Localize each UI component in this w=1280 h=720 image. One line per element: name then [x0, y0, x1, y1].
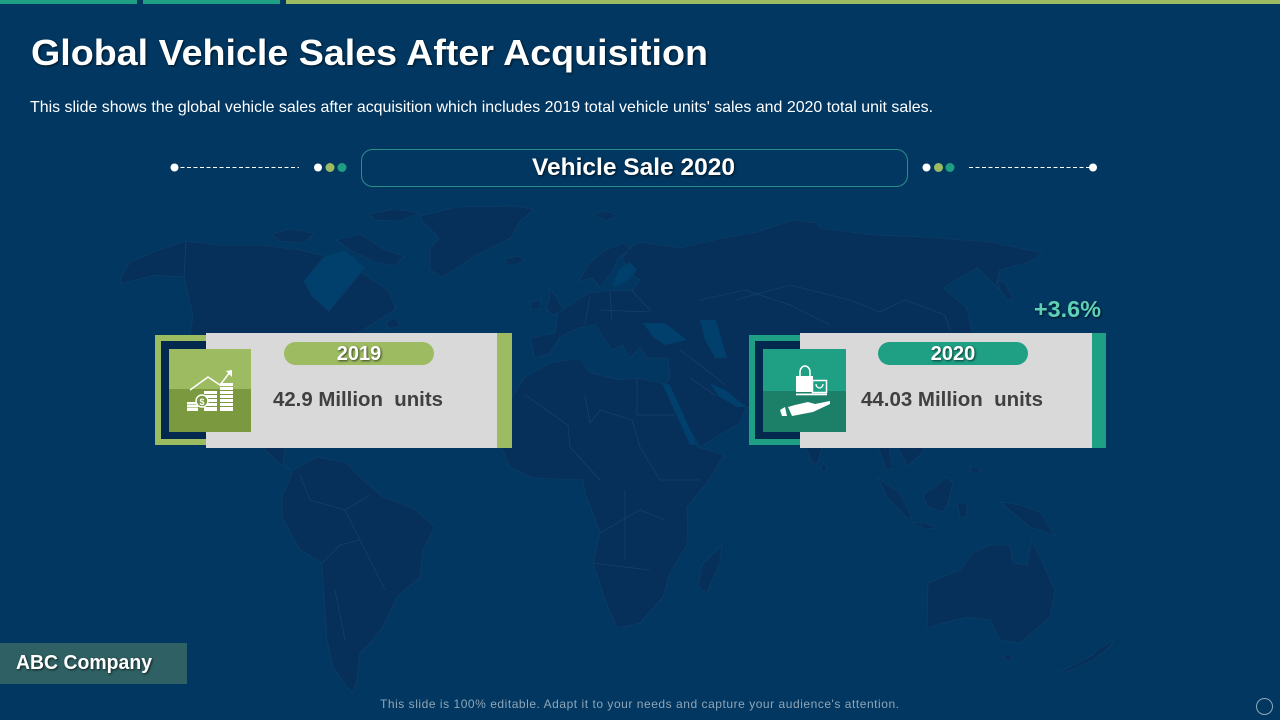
icon: coins and rising chart [169, 349, 251, 432]
year label 2019: 2019 [337, 343, 381, 365]
map: Scandinavia [579, 243, 630, 287]
icon: shopping bags over hand [763, 349, 846, 432]
map: Tasmania and New Zealand [1003, 640, 1113, 672]
map: Southeast Asian islands [821, 463, 1055, 535]
icon: nav circle [1256, 698, 1272, 714]
map: Madagascar [698, 545, 722, 593]
map: North America [121, 241, 396, 470]
panel: 2020 sales card [752, 333, 1106, 448]
card frame [158, 338, 218, 442]
map: inland seas [304, 250, 747, 445]
subtitle: This slide shows the global vehicle sales after acquisition which includes 2019 total vehicle units' sales and 2020 total unit sales. [30, 99, 933, 116]
value 2020: 44.03 Million units [861, 389, 1043, 411]
card right bar [497, 333, 512, 448]
title: Global Vehicle Sales After Acquisition [31, 32, 708, 73]
left dashed connector [170, 163, 346, 172]
map: Greenland [421, 206, 534, 277]
map: Iceland, Svalbard and British Isles [505, 211, 618, 315]
icon: coins and rising chart: $ [199, 397, 205, 407]
header box [362, 150, 908, 186]
section header: Vehicle Sale 2020 [170, 150, 1097, 186]
year label 2020: 2020 [931, 343, 975, 365]
card body [206, 333, 497, 448]
map: country borders [184, 241, 950, 640]
company badge [0, 643, 187, 684]
year pill 2020 [878, 342, 1028, 365]
header label: Vehicle Sale 2020 [532, 154, 735, 181]
map: Australia [927, 540, 1055, 643]
top accent bars [0, 0, 1280, 4]
card body [800, 333, 1092, 448]
company badge: ABC Company [16, 652, 153, 674]
right dashed connector [922, 163, 1097, 172]
year pill 2019 [284, 342, 434, 365]
map: Eurasia [530, 220, 1043, 470]
map: Arctic islands [271, 209, 420, 329]
value 2019: 42.9 Million units [273, 389, 443, 411]
card frame [752, 338, 812, 442]
panel: 2019 sales card [158, 333, 512, 448]
map: Japan and Sakhalin [997, 280, 1013, 301]
card right bar [1092, 333, 1106, 448]
map: South America [282, 457, 435, 693]
world map background [121, 206, 1113, 693]
growth percentage: +3.6% [1034, 296, 1101, 322]
map: Africa [500, 358, 725, 628]
footer note: This slide is 100% editable. Adapt it to your needs and capture your audience's attention. [380, 697, 899, 711]
